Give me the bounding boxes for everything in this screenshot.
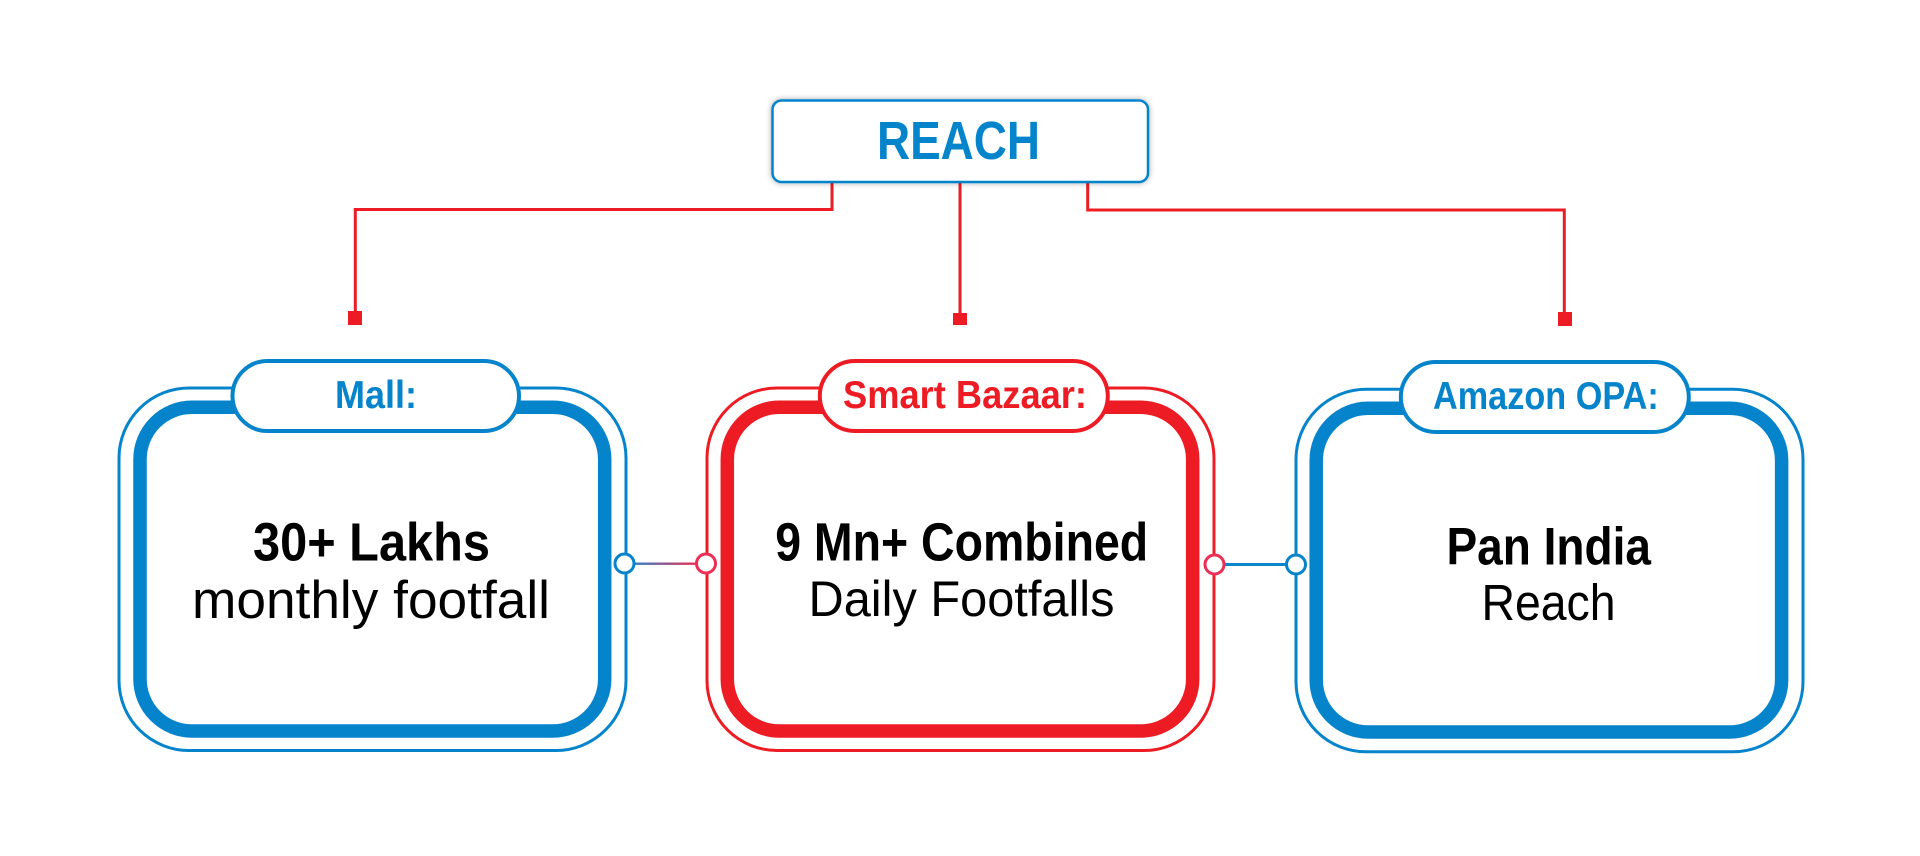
title: REACH [772,100,1148,182]
panel: Smart Bazaar [707,361,1214,750]
text: 30+ Lakhs monthly footfall: monthly footfall [192,571,550,630]
text: 9 Mn+ Combined Daily Footfalls: Daily Footfalls [808,571,1114,627]
connector: reach to Amazon OPA [1088,182,1572,326]
label: Amazon OPA: Amazon OPA: [1433,375,1659,418]
label: Mall: Mall: [335,374,417,417]
text: 9 Mn+ Combined Daily Footfalls [775,512,1148,627]
title: REACH: REACH [877,111,1040,171]
label: Smart Bazaar [820,361,1108,431]
text: 30+ Lakhs monthly footfall [192,512,550,630]
label: Amazon OPA [1401,362,1689,432]
text: Pan India Reach: Pan India [1446,518,1651,576]
text: 9 Mn+ Combined Daily Footfalls: 9 Mn+ Combined [775,512,1148,572]
connector: Smart Bazaar to Amazon OPA [1205,555,1306,574]
label: Mall [232,361,519,431]
panel: Amazon OPA [1296,362,1803,752]
connector: reach to Smart Bazaar [953,182,967,325]
connector: Mall to Smart Bazaar [615,554,716,573]
text: 30+ Lakhs monthly footfall: 30+ Lakhs [253,512,490,572]
label: Smart Bazaar: Smart Bazaar: [843,374,1087,417]
panel: Mall [119,361,626,750]
connector: reach to Mall [348,182,832,325]
text: Pan India Reach [1446,518,1651,631]
text: Pan India Reach: Reach [1482,574,1616,631]
